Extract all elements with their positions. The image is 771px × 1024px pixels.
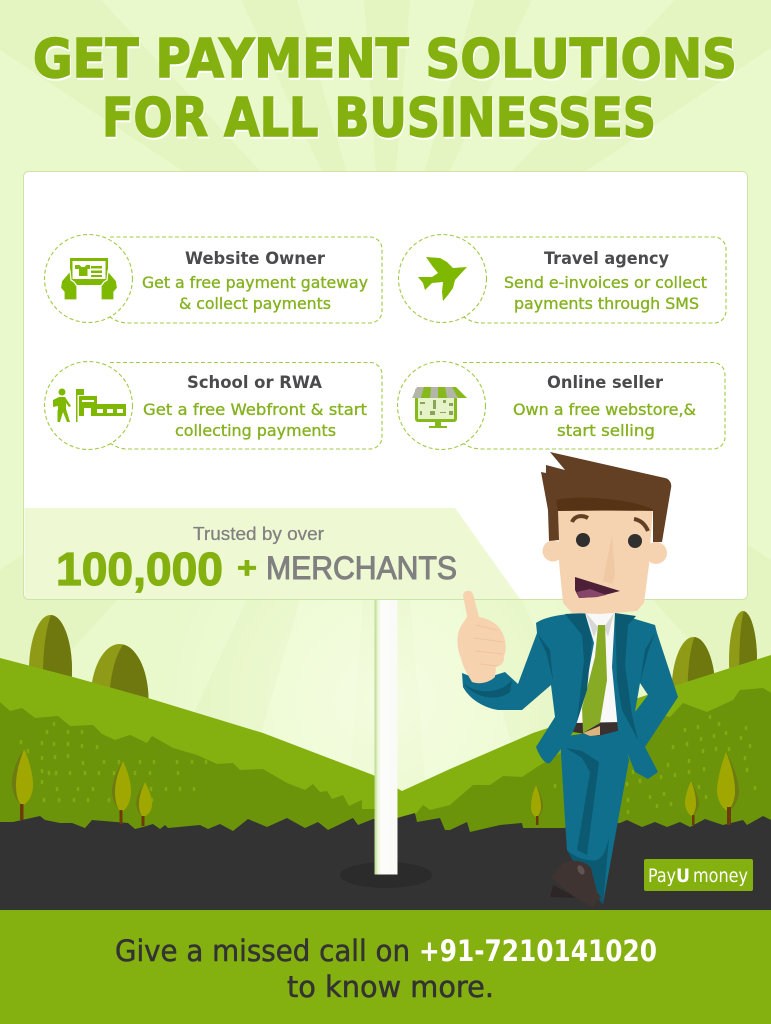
PayUmoney logo: Pay	[648, 865, 676, 887]
hand	[457, 591, 506, 683]
nose	[603, 535, 615, 584]
icon: student and school building	[53, 388, 126, 422]
jacket left side and arm	[462, 613, 594, 763]
card: online seller: Online seller	[547, 373, 664, 392]
shoe	[550, 861, 601, 907]
icon: hands holding tablet	[60, 258, 118, 300]
signpost	[340, 600, 432, 888]
shirt	[576, 613, 621, 723]
card: school or RWA	[44, 362, 382, 450]
card: school or RWA: collecting payments	[175, 421, 336, 440]
icon: airplane	[418, 257, 467, 301]
hedge dots	[21, 716, 755, 813]
hair	[541, 452, 671, 542]
icon: online storefront monitor	[412, 387, 467, 428]
card: website owner: Website Owner	[185, 249, 326, 268]
jacket right side and arm	[612, 613, 678, 779]
eyes	[576, 533, 642, 548]
card: website owner	[44, 234, 382, 323]
PayUmoney logo	[644, 859, 753, 891]
eyebrows	[572, 516, 648, 531]
character: businessman giving thumbs up	[457, 452, 678, 907]
card: website owner: Get a free payment gateway	[142, 273, 368, 292]
footer call to action: Give a missed call on	[115, 934, 410, 968]
card: travel agency	[398, 234, 726, 323]
trusted by merchants banner text	[56, 524, 457, 595]
card: website owner: & collect payments	[179, 294, 331, 313]
card: travel agency: payments through SMS	[514, 294, 699, 313]
footer call to action	[0, 910, 771, 1024]
panel: white signboard	[24, 172, 748, 600]
card: online seller	[398, 362, 725, 450]
trousers	[560, 728, 629, 904]
face	[558, 505, 653, 614]
tie	[582, 625, 607, 733]
trusted by merchants banner text: 100,000	[56, 543, 223, 595]
trees	[12, 749, 739, 826]
footer call to action: to know more.	[287, 970, 494, 1004]
hedge band right	[415, 688, 771, 840]
card: online seller: start selling	[557, 421, 655, 440]
mouth	[575, 577, 620, 598]
card: online seller: Own a free webstore,&	[513, 400, 696, 419]
ground	[0, 813, 771, 911]
belt	[573, 722, 621, 736]
card: school or RWA: School or RWA	[187, 373, 322, 392]
PayUmoney logo: money	[693, 865, 748, 887]
trusted by merchants banner text: +	[237, 552, 257, 585]
title	[33, 27, 737, 149]
card: travel agency: Travel agency	[544, 249, 669, 268]
PayUmoney logo: U	[676, 865, 690, 887]
hedge band left	[0, 702, 380, 840]
trusted by merchants banner text: MERCHANTS	[266, 550, 457, 586]
footer call to action: +91-7210141020	[419, 934, 657, 968]
card: travel agency: Send e-invoices or collect	[504, 273, 707, 292]
title: FOR ALL BUSINESSES	[102, 86, 656, 149]
trusted by merchants banner text: Trusted by over	[193, 524, 324, 544]
hills	[0, 655, 771, 840]
ears	[542, 540, 667, 564]
card: school or RWA: Get a free Webfront & start	[143, 400, 367, 419]
bushes behind hills	[25, 610, 760, 750]
